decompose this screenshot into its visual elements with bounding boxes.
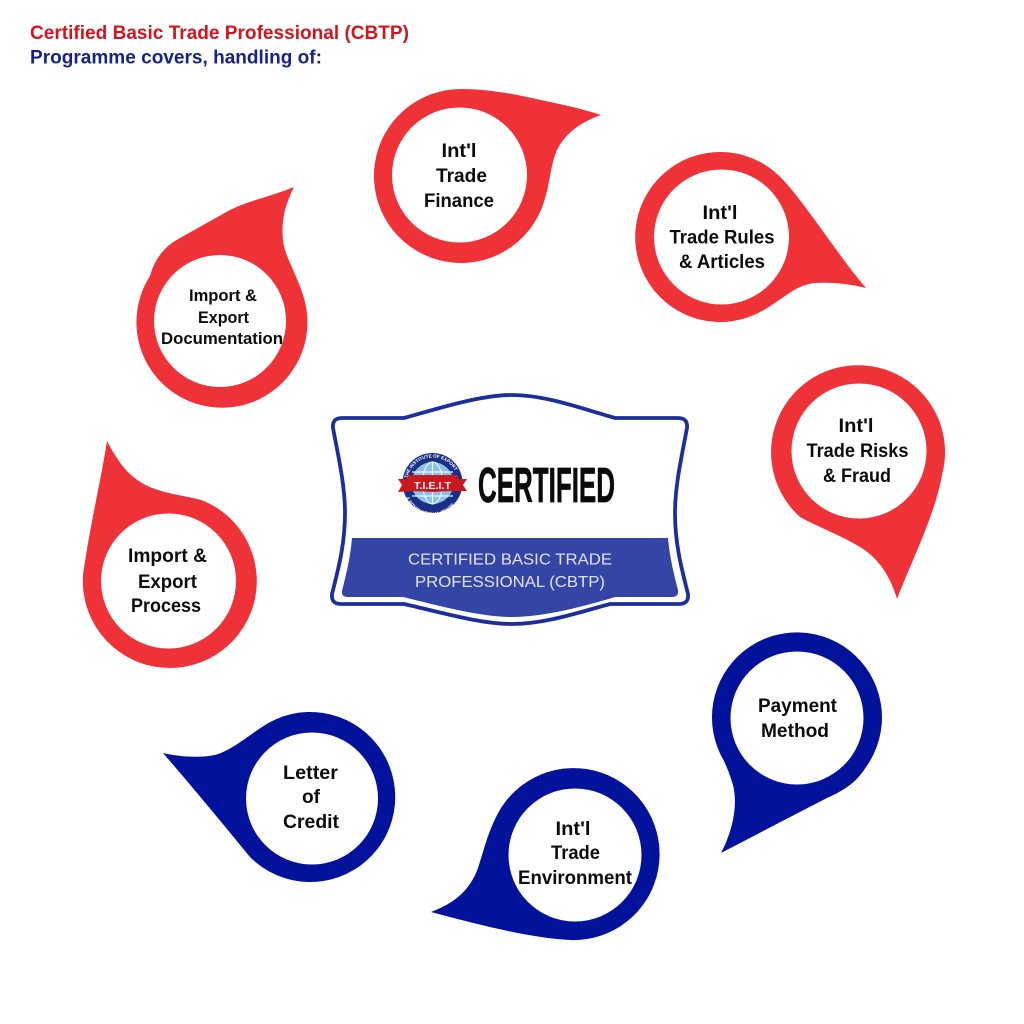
pin: Int'l Trade Finance: Int'l bbox=[442, 141, 476, 162]
badge banner bbox=[342, 538, 678, 617]
logo: TIEIT globe seal bbox=[398, 453, 467, 513]
pin: Int'l Trade Rules & Articles: Int'l bbox=[702, 203, 738, 224]
pin: Letter of Credit: Credit bbox=[283, 812, 340, 833]
pin: Int'l Trade Environment bbox=[431, 768, 660, 940]
central certified badge bbox=[330, 393, 690, 626]
pin: Import & Export Documentation: Documentation bbox=[161, 329, 283, 348]
logo: TIEIT globe seal: THE INSTITUTE OF EXPORT bbox=[404, 454, 458, 478]
logo: TIEIT globe seal: & INTERNATIONAL TRADE bbox=[406, 497, 454, 513]
pin: Int'l Trade Risks & Fraud: Trade Risks bbox=[806, 441, 908, 462]
pin: Int'l Trade Rules & Articles: & Articles bbox=[679, 252, 765, 273]
pin: Int'l Trade Finance: Trade bbox=[436, 166, 487, 187]
pin: Payment Method bbox=[712, 632, 882, 853]
pin: Import & Export Documentation: Export bbox=[198, 308, 249, 327]
pin: Int'l Trade Environment: Trade bbox=[551, 843, 600, 864]
pin: Import & Export Process: Import & bbox=[128, 546, 207, 567]
pin: Payment Method: Method bbox=[761, 721, 829, 742]
pin: Int'l Trade Finance bbox=[374, 89, 601, 263]
badge banner: PROFESSIONAL (CBTP) bbox=[415, 574, 605, 591]
pin: Import & Export Process: Export bbox=[138, 572, 198, 593]
pin: Payment Method: Payment bbox=[758, 696, 838, 717]
badge word: certified: CERTIFIED bbox=[478, 459, 615, 513]
pin: Import & Export Documentation: Import & bbox=[189, 286, 257, 305]
pin: Letter of Credit bbox=[163, 712, 395, 882]
title: Programme covers, handling of: bbox=[30, 48, 322, 68]
pin: Import & Export Process bbox=[83, 441, 257, 668]
pin: Int'l Trade Rules & Articles: Trade Rules bbox=[670, 228, 774, 248]
pin: Import & Export Process: Process bbox=[131, 596, 201, 617]
pin: Int'l Trade Finance: Finance bbox=[424, 191, 494, 212]
pin: Letter of Credit: Letter bbox=[283, 763, 339, 784]
pin: Int'l Trade Risks & Fraud: Int'l bbox=[838, 416, 874, 437]
title bbox=[30, 23, 409, 68]
pin: Int'l Trade Risks & Fraud: & Fraud bbox=[823, 466, 891, 487]
pin: Import & Export Documentation bbox=[136, 187, 307, 408]
pin: Int'l Trade Rules & Articles bbox=[635, 152, 866, 322]
logo: TIEIT globe seal: T.I.E.I.T bbox=[414, 480, 452, 492]
badge banner: CERTIFIED BASIC TRADE bbox=[408, 552, 612, 568]
title: Certified Basic Trade Professional (CBTP) bbox=[30, 23, 409, 44]
pin: Int'l Trade Environment: Environment bbox=[518, 868, 633, 889]
pin: Int'l Trade Environment: Int'l bbox=[556, 819, 590, 840]
pin: Int'l Trade Risks & Fraud bbox=[771, 365, 945, 599]
pin: Letter of Credit: of bbox=[302, 787, 321, 808]
